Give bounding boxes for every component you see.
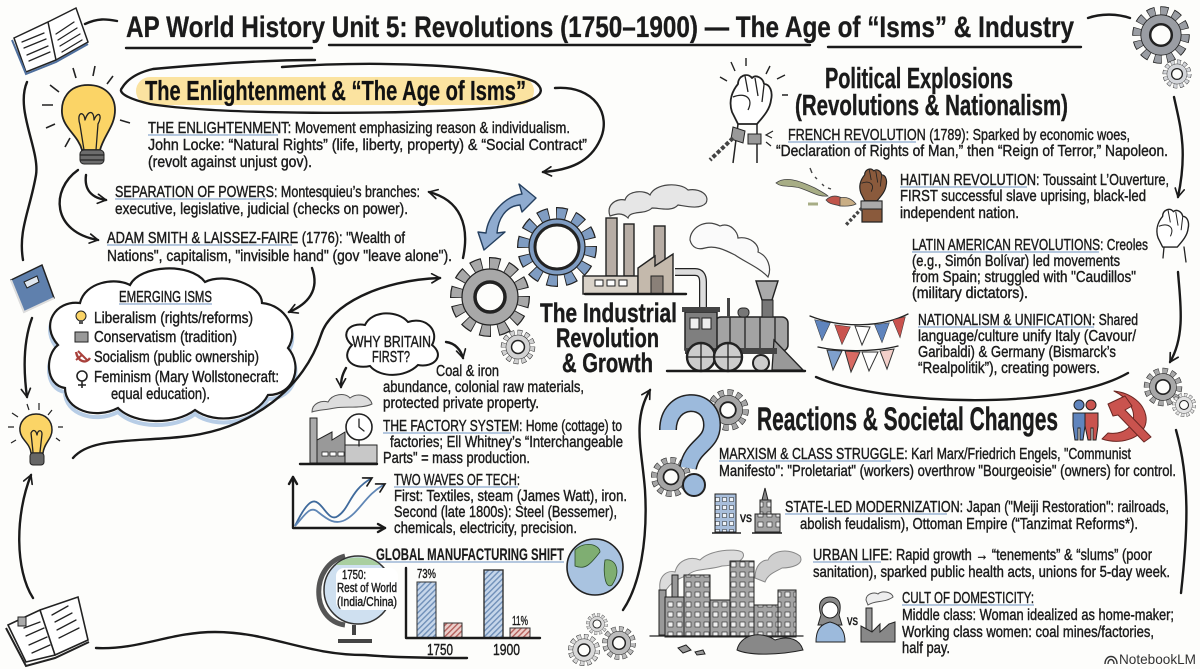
text: nationalism and unification: Garibaldi) & Germany (Bismarck’s bbox=[918, 344, 1116, 361]
connector: curve under political bbox=[816, 373, 1128, 400]
arrow: gears up to industrial bbox=[623, 390, 650, 610]
text: two waves of tech: chemicals, electricity, precision. bbox=[394, 520, 577, 537]
text: separation of powers bbox=[115, 184, 420, 218]
text: why britain answer: protected private property. bbox=[383, 395, 539, 412]
callout: why britain first cloud bbox=[346, 313, 438, 375]
icon: small bulb bbox=[76, 311, 86, 324]
icon: earth globe bbox=[567, 539, 623, 595]
arrow: adam smith to emerging isms bbox=[289, 268, 315, 312]
logo: notebooklm: NotebookLM bbox=[1119, 651, 1196, 667]
text: latin american revolutions: (military dictators). bbox=[912, 285, 1028, 302]
text: french revolution bbox=[776, 127, 1168, 160]
icon: factory with clock bbox=[300, 395, 377, 464]
list: isms: Feminism (Mary Wollstonecraft: bbox=[94, 369, 279, 386]
text: why britain answer bbox=[383, 363, 584, 412]
icon: raised fist with broken chain bbox=[710, 58, 788, 163]
icon: venus symbol bbox=[77, 371, 87, 388]
arrow: bulb to adam smith bbox=[60, 170, 98, 240]
text: adam smith: Nations", capitalism, "invisible hand" (gov "leave alone"). bbox=[107, 248, 452, 265]
icon: blue circular arrows bbox=[478, 184, 536, 250]
arrow: left line down to bulb bbox=[25, 318, 32, 397]
text: the enlightenment: THE ENLIGHTENMENT: Movement emphasizing reason & individualism. bbox=[148, 120, 570, 137]
text: the enlightenment: (revolt against unjust gov). bbox=[148, 154, 312, 171]
text: marxism bbox=[719, 446, 1176, 480]
chart: manufacturing bar chart bbox=[406, 566, 540, 659]
text: nationalism and unification: NATIONALISM & UNIFICATION: Shared bbox=[918, 312, 1138, 329]
connector: bottom wavy line bbox=[96, 632, 467, 658]
icon: gears top right bbox=[1138, 12, 1189, 86]
chart: manufacturing bar chart: 73% bbox=[417, 566, 436, 581]
text: why britain answer: abundance, colonial raw materials, bbox=[383, 379, 584, 396]
text: latin american revolutions: (e.g., Simón Bolívar) led movements bbox=[912, 253, 1120, 270]
icon: polluted city bbox=[650, 550, 803, 655]
text: latin american revolutions: from Spain; struggled with "Caudillos" bbox=[912, 269, 1136, 286]
arrow: britain to factory bbox=[341, 368, 346, 387]
text: haitian revolution bbox=[900, 172, 1169, 222]
icon: open book top left bbox=[12, 8, 88, 74]
panel: political explosions bbox=[710, 58, 1189, 400]
callout: why britain first cloud: FIRST? bbox=[372, 349, 410, 366]
list: isms bbox=[94, 310, 279, 403]
text: the enlightenment bbox=[148, 120, 587, 171]
icon: small hammer and sickle bbox=[76, 351, 90, 361]
heading: political explosions bbox=[795, 63, 1068, 122]
heading: the industrial revolution and growth bbox=[540, 298, 677, 378]
heading: global manufacturing shift: GLOBAL MANUFACTURING SHIFT bbox=[376, 545, 564, 564]
heading: emerging isms: EMERGING ISMS bbox=[119, 289, 212, 306]
icon: blue gear bbox=[525, 215, 589, 279]
list: isms: Liberalism (rights/reforms) bbox=[94, 310, 253, 327]
text: cult of domesticity: half pay. bbox=[902, 640, 950, 657]
chart: manufacturing bar chart: 1900 bbox=[493, 642, 520, 659]
heading: the industrial revolution and growth: The Industrial bbox=[540, 298, 677, 328]
icon: factory bbox=[583, 185, 707, 310]
icon: desk globe with label: (India/China) bbox=[337, 594, 397, 609]
icon: grey gear bbox=[458, 265, 522, 329]
icon: gears right middle bbox=[1148, 372, 1194, 415]
connector: book to title bbox=[85, 19, 117, 24]
arrow: bulb to separation of powers bbox=[86, 175, 106, 200]
arrow: gears to separation of powers bbox=[429, 192, 465, 258]
text: cult of domesticity bbox=[902, 590, 1174, 657]
text: why britain answer: Coal & iron bbox=[436, 363, 499, 380]
list: isms: Socialism (public ownership) bbox=[94, 349, 259, 366]
connector: gear to title bbox=[1088, 15, 1130, 18]
heading: the industrial revolution and growth: Revolution bbox=[556, 323, 659, 353]
icon: hammer and sickle bbox=[1102, 391, 1151, 442]
icon: caribbean map and brown fist bbox=[776, 168, 887, 226]
text: factory system: factories; Ell Whitney’s “Interchangeable bbox=[390, 434, 623, 451]
icon: desk globe with label: Rest of World bbox=[337, 580, 397, 595]
heading: the industrial revolution and growth: & Growth bbox=[562, 348, 653, 378]
heading: political explosions: (Revolutions & Nationalism) bbox=[795, 90, 1068, 122]
heading: enlightenment: The Enlightenment & “The Age of Isms” bbox=[145, 75, 526, 106]
panel: industrial revolution centre bbox=[289, 184, 805, 663]
arrow: book up to bulb bbox=[19, 475, 33, 598]
text: factory system: THE FACTORY SYSTEM: Home (cottage) to bbox=[383, 418, 622, 435]
panel: reactions and societal changes bbox=[650, 391, 1186, 657]
text: two waves of tech bbox=[394, 472, 627, 537]
icon: question mark with gears bbox=[655, 393, 745, 496]
connector: right line lower bbox=[1176, 430, 1186, 593]
text: urban life bbox=[813, 547, 1170, 581]
icon: bunting flags bbox=[810, 314, 908, 372]
icon: bottom gears bbox=[571, 615, 632, 663]
icon: scroll bbox=[75, 332, 88, 342]
text: adam smith: ADAM SMITH & LAISSEZ-FAIRE (1776): "Wealth of bbox=[107, 230, 405, 247]
icon: light bulb bbox=[42, 66, 130, 164]
arrow: britain to coal bbox=[446, 342, 463, 358]
text: nationalism and unification: language/culture unify Italy (Cavour/ bbox=[918, 328, 1136, 345]
text: adam smith bbox=[107, 230, 452, 265]
text: two waves of tech: First: Textiles, steam (James Watt), iron. bbox=[394, 488, 627, 505]
icon: buildings vs skyscraper: vs bbox=[740, 509, 752, 525]
text: state-led modernization bbox=[785, 499, 1169, 533]
arrow: right line to gears bbox=[1170, 272, 1181, 362]
text: factory system: Parts" = mass production. bbox=[383, 450, 530, 467]
icon: blue book bbox=[11, 265, 54, 312]
list: isms: Conservatism (tradition) bbox=[94, 329, 237, 346]
text: separation of powers: SEPARATION OF POWERS: Montesquieu’s branches: bbox=[115, 184, 420, 201]
connector: left line upper bbox=[22, 82, 36, 260]
text: cult of domesticity: CULT OF DOMESTICITY: bbox=[902, 590, 1034, 607]
icon: woman vs factory: vs bbox=[847, 612, 858, 628]
icon: two workers bbox=[1073, 400, 1098, 440]
text: separation of powers: executive, legislative, judicial (checks on power). bbox=[115, 201, 408, 218]
chart: manufacturing bar chart: 11% bbox=[512, 613, 528, 628]
panel: emerging isms cloud bbox=[49, 268, 295, 425]
icon: woman vs factory bbox=[816, 592, 895, 642]
text: nationalism and unification: “Realpolitik”), creating powers. bbox=[918, 360, 1100, 377]
text: two waves of tech: TWO WAVES OF TECH: bbox=[394, 472, 520, 489]
text: factory system bbox=[383, 418, 623, 467]
panel: enlightenment bbox=[42, 60, 604, 312]
text: the enlightenment: John Locke: “Natural Rights” (life, liberty, property) & “Social Contract” bbox=[148, 137, 587, 154]
icon: buildings vs skyscraper bbox=[712, 488, 782, 533]
icon: locomotive bbox=[667, 223, 805, 371]
text: nationalism and unification bbox=[918, 312, 1138, 377]
icon: small fist right bbox=[1157, 209, 1189, 262]
chart: two waves line graph bbox=[289, 477, 385, 532]
text: haitian revolution: FIRST successful slave uprising, black-led bbox=[900, 188, 1146, 205]
icon: light bulb lower bbox=[8, 403, 63, 465]
arrow: enlightenment to gears bbox=[543, 88, 604, 172]
heading: political explosions: Political Explosions bbox=[825, 63, 1013, 95]
text: latin american revolutions bbox=[912, 237, 1148, 302]
arrow: bulb to gears bbox=[73, 278, 440, 458]
text: haitian revolution: independent nation. bbox=[900, 205, 1019, 222]
chart: manufacturing bar chart: 1750 bbox=[427, 642, 453, 659]
icon: desk globe with label bbox=[319, 556, 398, 641]
arrow: right line to fist bbox=[1174, 97, 1183, 197]
text: two waves of tech: Second (late 1800s): Steel (Bessemer), bbox=[394, 504, 617, 521]
list: isms: equal education). bbox=[111, 386, 210, 403]
heading: enlightenment bbox=[121, 60, 541, 113]
icon: desk globe with label: 1750: bbox=[342, 567, 366, 582]
icon: open book bottom left bbox=[6, 597, 89, 666]
icon: small gear bbox=[504, 333, 532, 361]
callout: why britain first cloud: WHY BRITAIN bbox=[352, 334, 431, 351]
